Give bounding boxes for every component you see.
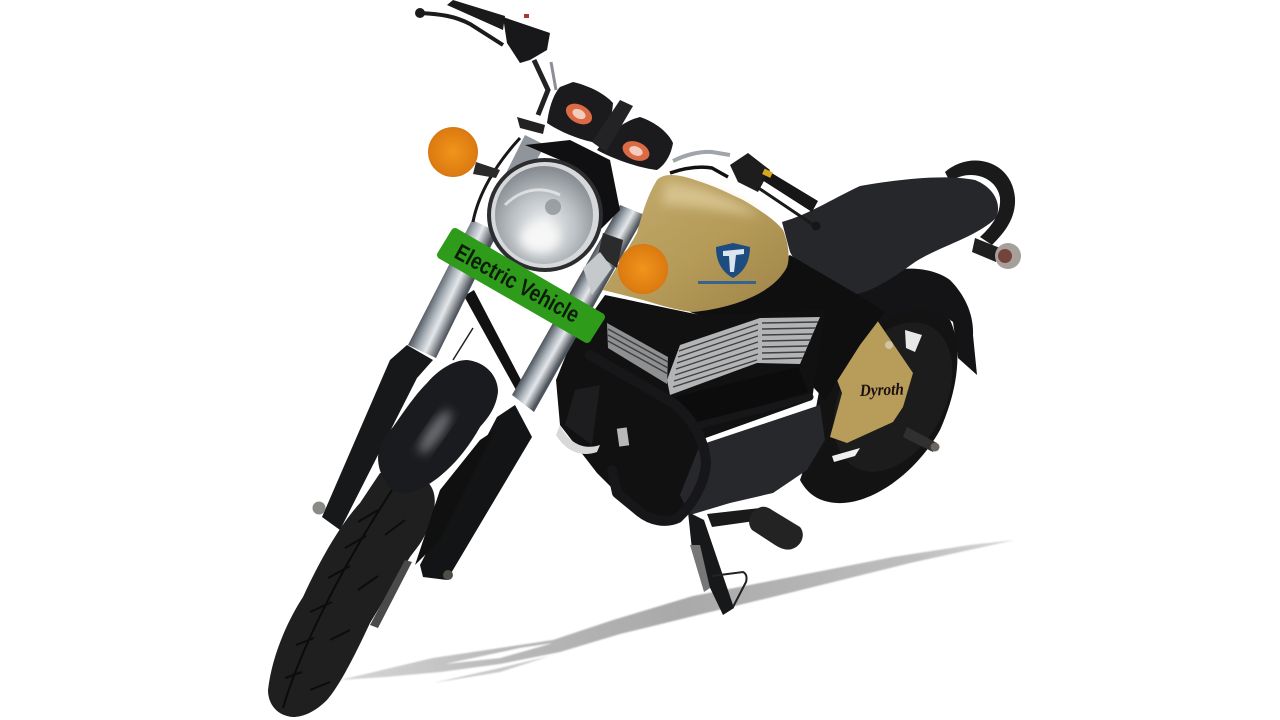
engine cooling fins [607, 317, 820, 395]
left turn signal [428, 127, 500, 178]
side cover with Dyroth script [813, 320, 913, 443]
fork brace and cable [453, 290, 521, 390]
left handlebar and mirror stem [415, 0, 556, 115]
side stand [688, 512, 747, 615]
side cover with Dyroth script: Dyroth [859, 379, 904, 400]
rear fender [820, 269, 977, 375]
right handlebar [670, 152, 820, 230]
headlight mount [525, 140, 620, 230]
dark arc behind headlight [473, 138, 520, 222]
seat and grab rail [782, 160, 1021, 295]
frame under tank [690, 255, 885, 400]
front fork lower legs [312, 345, 532, 580]
crash guard [590, 355, 810, 521]
instrument gauges [517, 82, 673, 170]
headlight [487, 158, 603, 272]
fuel tank with logo [603, 175, 789, 312]
foot peg [707, 507, 803, 550]
front wheel tyre [268, 473, 435, 717]
ground shadow [340, 540, 1015, 683]
front mudguard [378, 360, 498, 493]
chrome fork tubes [408, 135, 645, 412]
rear foot peg [903, 427, 940, 452]
right turn signal [583, 233, 668, 295]
engine block [556, 295, 825, 520]
rear wheel [800, 302, 976, 503]
green Electric Vehicle plate: Electric Vehicle [451, 239, 584, 328]
